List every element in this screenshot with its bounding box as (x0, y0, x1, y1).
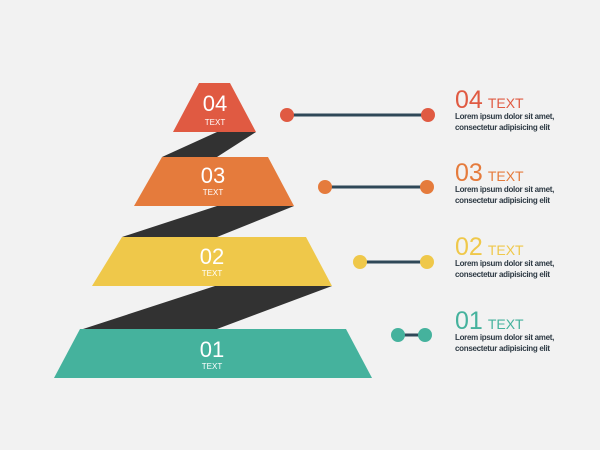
text block 03: 03 (455, 159, 483, 187)
tier 01: TEXT (202, 362, 222, 371)
tier 03 (134, 157, 294, 206)
text block 01: consectetur adipisicing elit (455, 344, 550, 352)
tier 02: 02 (200, 244, 224, 269)
text block 01: TEXT (488, 316, 524, 332)
connector 02 (353, 255, 434, 269)
text block 04: 04 (455, 86, 483, 114)
tier 01 (54, 329, 372, 378)
text block 03: TEXT (488, 168, 524, 184)
text block 04 (455, 86, 554, 132)
connector 04 (280, 108, 435, 122)
tier 03: 03 (201, 163, 225, 188)
text block 04: consectetur adipisicing elit (455, 122, 550, 132)
connector 01 (391, 328, 432, 342)
text block 04: Lorem ipsum dolor sit amet, (455, 112, 554, 121)
text block 02: TEXT (488, 242, 524, 258)
connector 03 (318, 180, 434, 194)
text block 03: Lorem ipsum dolor sit amet, (455, 185, 554, 194)
text block 01: 01 (455, 307, 483, 335)
text block 02: 02 (455, 233, 483, 261)
tier 04: 04 (203, 91, 227, 116)
text block 04: TEXT (488, 95, 524, 111)
text block 02: Lorem ipsum dolor sit amet, (455, 259, 554, 268)
tier 04 (173, 83, 256, 132)
text block 03: consectetur adipisicing elit (455, 196, 550, 204)
text block 03 (455, 159, 554, 204)
tier 02 (92, 237, 332, 286)
ribbon: 4 to 3 (162, 132, 256, 157)
text block 01: Lorem ipsum dolor sit amet, (455, 333, 554, 342)
tier 02: TEXT (202, 269, 222, 278)
text block 02: consectetur adipisicing elit (455, 270, 550, 278)
text block 01 (455, 307, 554, 352)
text block 02 (455, 233, 554, 278)
tier 03: TEXT (203, 188, 223, 197)
tier 04: TEXT (205, 118, 225, 127)
ribbon: 2 to 1 (83, 286, 332, 329)
tier 01: 01 (200, 337, 224, 362)
ribbon: 3 to 2 (122, 206, 294, 237)
